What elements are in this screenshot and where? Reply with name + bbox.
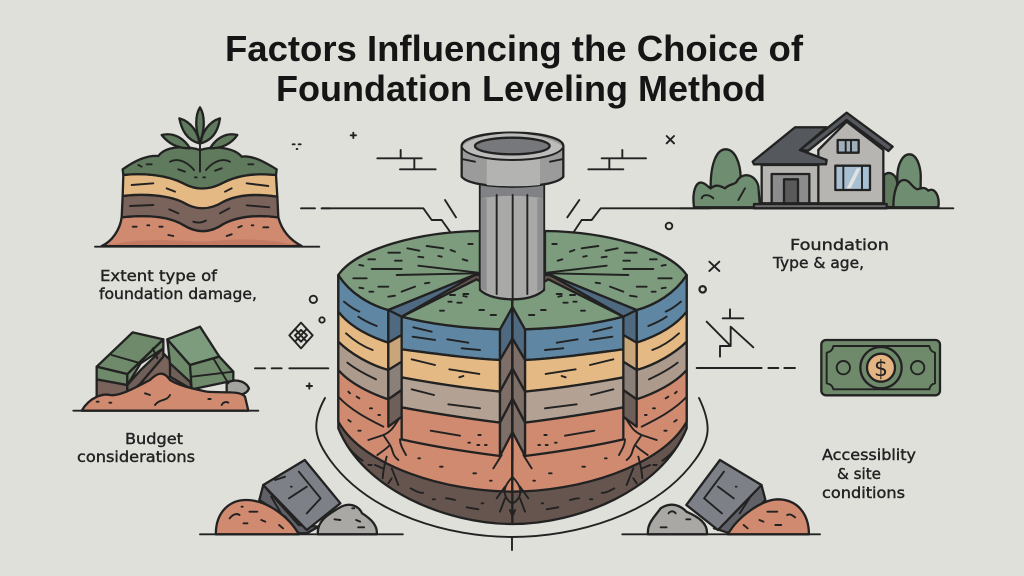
text: foundation type and age: Foundation [790, 236, 889, 254]
connector lines and small decorative marks around the cylinder [322, 133, 710, 293]
text: accessibility and site conditions: conditions [822, 484, 905, 502]
text: foundation type and age: Type & age, [772, 254, 864, 272]
text: foundation type and age [772, 236, 889, 272]
text: extent type of foundation damage: foundation damage, [99, 285, 257, 303]
icon: surrounding arc and base tick [316, 398, 708, 550]
text: budget considerations: Budget [125, 430, 183, 448]
text: accessibility and site conditions: & site [837, 465, 881, 483]
icons: decorative symbols left of cylinder [255, 144, 330, 389]
title: Foundation Leveling Method [276, 68, 766, 109]
text: extent type of foundation damage: Extent type of [100, 267, 218, 285]
text: extent type of foundation damage [99, 267, 257, 303]
icon: left rubble pile [200, 460, 403, 534]
title: Factors Influencing the Choice of [225, 28, 804, 69]
text: budget considerations [77, 430, 195, 466]
icon: broken concrete slabs on soil [73, 327, 258, 411]
icon: right rubble pile [622, 460, 820, 534]
chart: layered soil cylinder [338, 133, 687, 524]
icon: dollar bill [821, 340, 940, 395]
text: budget considerations: considerations [77, 448, 195, 466]
icon: central pier column [462, 133, 563, 299]
icon: dollar bill: $ [874, 357, 888, 382]
text: accessibility and site conditions [822, 446, 916, 502]
text: accessibility and site conditions: Accessiblity [822, 446, 916, 464]
title [225, 28, 804, 109]
icon: house with trees [680, 113, 953, 208]
icons: decorative symbols right of cylinder [697, 262, 795, 368]
icon: soil profile with plant [95, 107, 319, 247]
